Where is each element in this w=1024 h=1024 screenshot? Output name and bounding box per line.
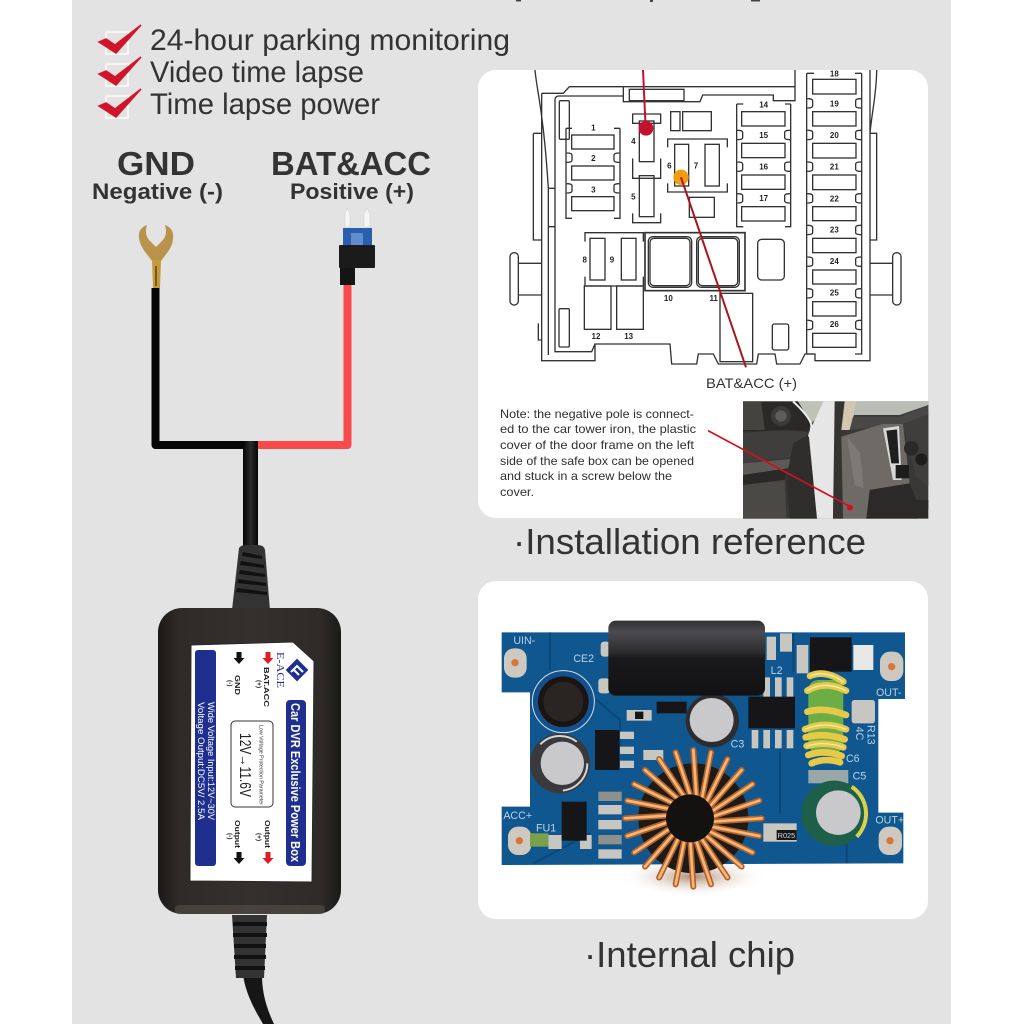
installation note: and stuck in a screw below the (500, 469, 672, 483)
negative pointer line (643, 70, 646, 128)
side clips (518, 133, 893, 340)
silkscreen labels: CE2 (573, 653, 594, 665)
silkscreen labels: OUT- (876, 687, 902, 699)
circuit board photo illustration (502, 621, 905, 897)
installation note: Note: the negative pole is connect- (500, 407, 694, 421)
positive point marker (673, 170, 689, 185)
heading: BAT&ACC positive (271, 145, 431, 204)
feature checklist (99, 24, 510, 121)
copper toroid inductor (625, 750, 762, 887)
fuse numbers: 5 (631, 193, 636, 202)
fuse numbers: 7 (694, 161, 699, 170)
fuses 4-9 (590, 121, 719, 280)
fuse numbers: 25 (830, 288, 839, 297)
fuse numbers: 4 (631, 137, 636, 146)
silkscreen labels: R025 (778, 831, 795, 840)
fuse numbers: 1 (591, 124, 596, 133)
power box body (158, 608, 341, 914)
terminal labels (226, 667, 272, 849)
title: internal chip: ·Internal chip (584, 934, 795, 975)
input capacitor dark (532, 671, 594, 733)
relays and blocks (584, 112, 789, 362)
fuse numbers: 13 (624, 332, 634, 341)
terminal labels: GND (233, 675, 242, 696)
silkscreen labels: ACC+ (503, 810, 532, 822)
heading: BAT&ACC positive: Positive (+) (290, 179, 414, 204)
green capacitor (801, 781, 867, 846)
fuses 1-3 (572, 135, 614, 211)
silkscreen labels: 4C (853, 727, 865, 741)
installation note: side of the safe box can be opened (500, 454, 694, 468)
fuse frames (566, 73, 862, 354)
heading: GND negative (92, 145, 223, 204)
protection parameter box: 12V→11.6V (236, 733, 253, 798)
frame comb notches (567, 99, 861, 330)
fuse numbers: 18 (830, 69, 839, 78)
title bar: Car DVR Exclusive Power Box (288, 703, 302, 862)
strain relief and cable bottom (232, 915, 274, 1024)
input spec bar: Voltage Output:DC5V/ 2.5A (195, 702, 206, 821)
title: installation reference: ·Installation reference (513, 521, 866, 562)
product label (190, 642, 314, 882)
check item: video time lapse: Video time lapse (150, 56, 364, 89)
fuse numbers: 8 (582, 255, 587, 264)
small solder components (530, 633, 875, 859)
large cylinder capacitor (608, 621, 765, 696)
fuse numbers: 20 (830, 131, 839, 140)
silkscreen labels: C5 (853, 770, 866, 782)
positive pointer line (681, 177, 746, 367)
silkscreen labels: UIN- (513, 635, 536, 647)
black ICs (562, 637, 852, 841)
wiring harness (156, 284, 348, 547)
polarity arrows (234, 652, 274, 864)
fuse numbers: 14 (759, 100, 769, 109)
panel: internal chip (478, 581, 928, 919)
silkscreen labels: OUT+ (875, 814, 904, 826)
fuse numbers: 15 (759, 131, 769, 140)
car door photo illustration (708, 401, 928, 519)
fuses 14-17 (742, 112, 785, 221)
silkscreen labels: R13 (864, 725, 876, 745)
silkscreen labels: C3 (731, 738, 744, 750)
toroid shadow (620, 857, 767, 897)
label: BAT&ACC (+): BAT&ACC (+) (706, 375, 797, 391)
fuse numbers: 6 (667, 161, 672, 170)
panel: installation reference (478, 69, 928, 519)
heading: GND negative: Negative (-) (92, 179, 223, 204)
black negative wire (156, 288, 250, 445)
logo: E-ACE (274, 652, 308, 688)
fuse numbers: 9 (610, 255, 615, 264)
title bar (286, 700, 306, 866)
diagram outline (535, 70, 877, 364)
icon: gold spade terminal (139, 225, 173, 288)
heading: BAT&ACC positive: BAT&ACC (271, 145, 431, 182)
fuse numbers: 12 (592, 332, 601, 341)
fuse numbers: 19 (830, 99, 839, 108)
yellow toroid coil (805, 674, 846, 763)
fuse numbers: 24 (830, 257, 839, 266)
fuse numbers (582, 69, 839, 341)
pcb substrate (502, 632, 905, 865)
input spec bar: Wide Voltage Input:12V~30V (205, 702, 216, 821)
fuse numbers: 16 (759, 163, 769, 172)
fuse numbers: 3 (591, 185, 596, 194)
protection parameter box: Low Voltage Protection Parameter (258, 725, 264, 805)
logo: E-ACE: E-ACE (274, 652, 286, 688)
fuse numbers: 2 (591, 154, 596, 163)
fuse numbers: 17 (759, 194, 769, 203)
ground point pointer (708, 431, 853, 511)
fuse numbers: 23 (830, 225, 839, 234)
terminal labels: (+) (255, 833, 262, 841)
input spec bar (195, 650, 216, 866)
installation note: cover of the door frame on the left (500, 438, 695, 452)
terminal labels: Output (263, 820, 272, 849)
terminal labels: (-) (226, 680, 233, 686)
fuses 18-26 (813, 79, 856, 347)
fuse numbers: 21 (830, 163, 839, 172)
negative point marker (639, 121, 653, 136)
icon: blue blade fuse tap (339, 208, 375, 285)
silkscreen labels: L2 (771, 665, 783, 677)
installation note: cover. (500, 485, 534, 499)
fuse numbers: 26 (830, 320, 839, 329)
terminal labels: BAT.ACC (262, 667, 271, 708)
silkscreen labels: FU1 (536, 822, 556, 834)
cropped heading descender marks (516, 0, 760, 2)
red positive wire (258, 284, 348, 445)
silkscreen labels: C6 (846, 753, 860, 765)
terminal labels: Output (233, 820, 242, 849)
main cable (243, 441, 258, 547)
fuse box diagram (510, 69, 901, 367)
mounting pads (504, 648, 903, 855)
installation note (500, 407, 696, 499)
check item: time lapse power: Time lapse power (150, 88, 380, 121)
fuse numbers: 10 (664, 294, 673, 303)
fuse numbers: 22 (830, 194, 839, 203)
protection parameter box (231, 721, 273, 807)
check item: 24-hour parking monitoring: 24-hour parking monitoring (150, 24, 510, 57)
silkscreen labels (503, 635, 904, 840)
strain relief top (232, 545, 270, 610)
heading: GND negative: GND (117, 145, 195, 182)
terminal labels: (-) (226, 833, 233, 840)
terminal labels: (+) (255, 680, 262, 688)
installation note: ed to the car tower iron, the plastic (500, 422, 696, 436)
silver capacitors (530, 694, 739, 793)
fuse numbers: 11 (709, 294, 718, 303)
